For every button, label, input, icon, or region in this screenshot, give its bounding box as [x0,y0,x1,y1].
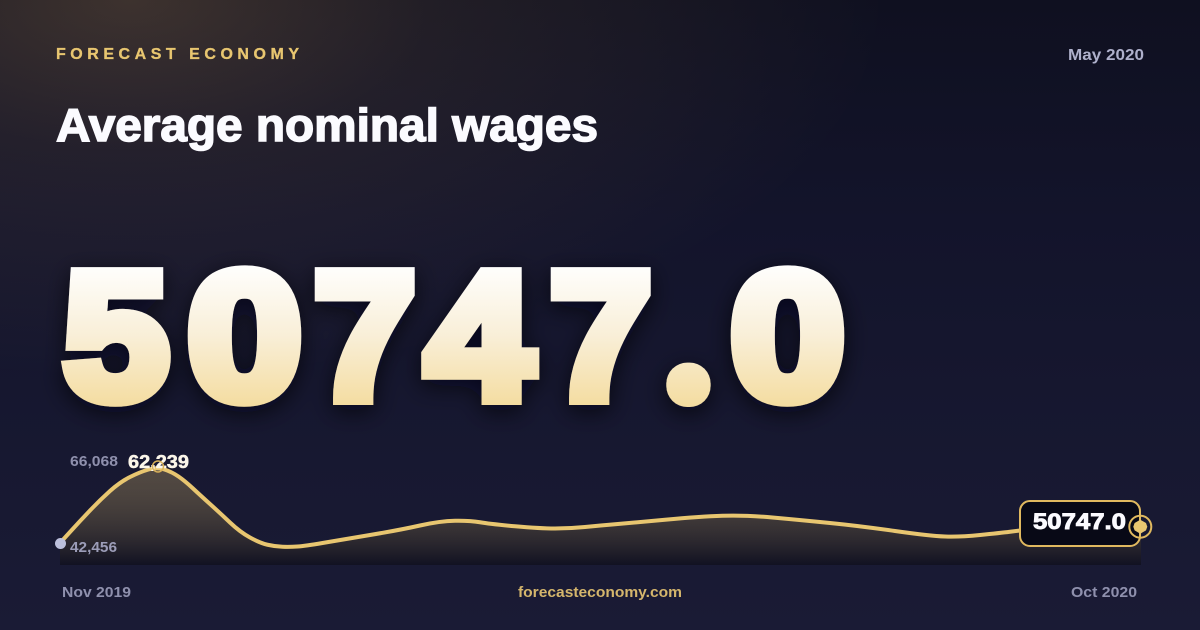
big value [64,235,845,437]
big value: 4 [426,235,533,437]
minimum label: 42,456 [70,539,117,556]
chart line [60,468,1020,547]
start point [55,538,66,549]
big value: 0 [188,235,302,436]
current value callout: 50747.0 [1033,509,1126,534]
chart area fill [60,468,1141,565]
start date label: Nov 2019 [62,584,131,601]
end date label: Oct 2020 [1071,584,1137,601]
current value callout [1020,501,1140,546]
peak value label: 62,239 [128,452,189,472]
big value: 0 [731,235,845,436]
brand label: FORECAST ECONOMY [56,46,299,63]
maximum label: 66,068 [70,453,118,470]
peak marker [152,461,164,472]
big value: . [686,373,691,390]
source url: forecasteconomy.com [518,584,682,601]
big value: 5 [64,236,169,437]
big value: 7 [314,236,416,437]
big value: 7 [550,236,652,437]
current point marker [1129,516,1151,538]
line chart [55,452,1151,565]
date label: May 2020 [1068,47,1144,64]
title: Average nominal wages [56,99,598,151]
